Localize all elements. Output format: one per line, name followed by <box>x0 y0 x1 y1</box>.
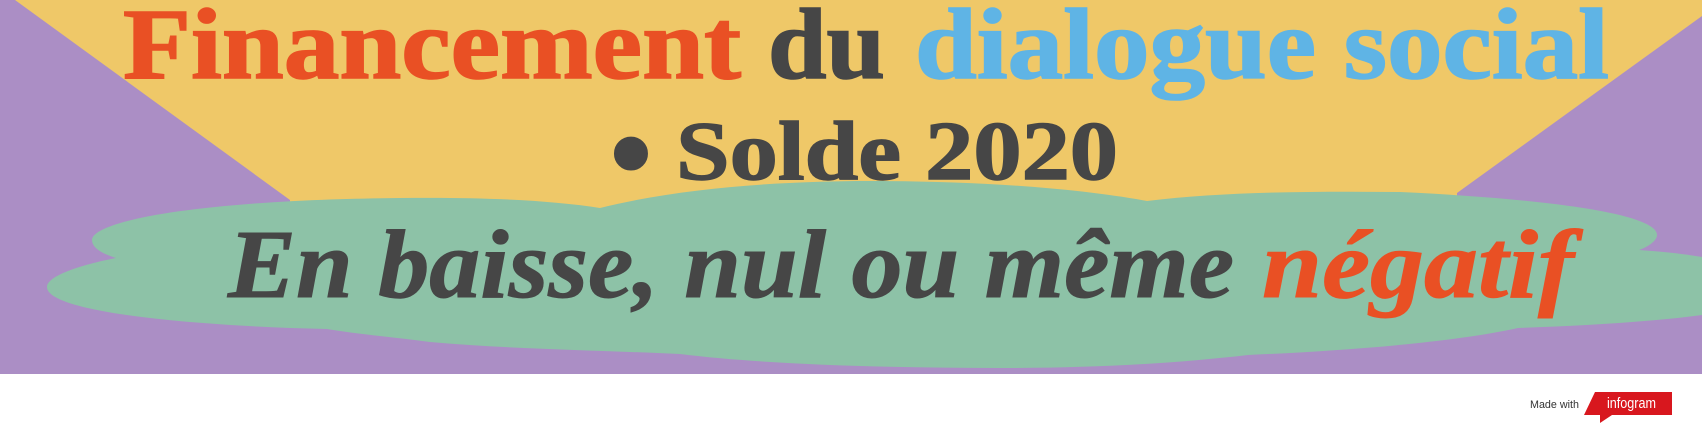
infogram logo text: infogram <box>1607 395 1656 412</box>
headline in cloud <box>227 211 1584 318</box>
infogram logo flag <box>1584 392 1672 423</box>
headline: En baisse, nul ou même: En baisse, nul ou même <box>227 211 1234 318</box>
green cloud shape <box>47 181 1702 368</box>
infogram attribution <box>1530 392 1672 423</box>
title line 2 <box>609 85 1118 223</box>
subtitle: Solde 2020: Solde 2020 <box>676 105 1118 198</box>
headline word: négatif: négatif <box>1262 211 1584 318</box>
yellow background shape <box>15 0 1702 230</box>
made with label: Made with <box>1530 399 1579 411</box>
title line 1 <box>123 0 1609 100</box>
bullet: • <box>609 85 653 223</box>
